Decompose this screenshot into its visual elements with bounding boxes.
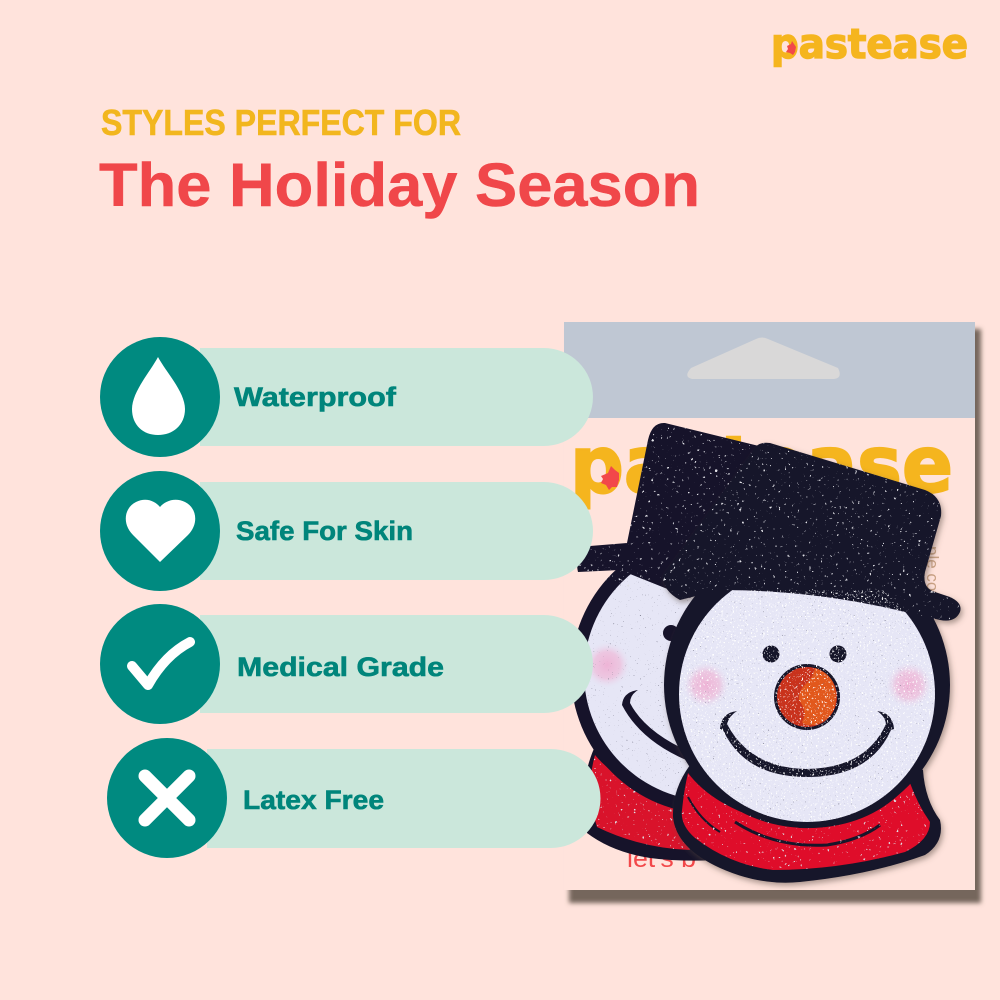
glitter on front scarf [682,776,927,870]
back face outline [571,532,853,814]
pill [200,482,593,580]
icon: heart [126,500,195,562]
pill [200,348,593,446]
right cheek [885,661,933,709]
card footer text: let's b [627,845,696,873]
icon circle [100,337,220,457]
icon: check mark [132,642,190,685]
icon: water drop [132,357,185,435]
feature: medical grade [100,604,593,724]
back scarf outline [583,740,730,861]
label: Waterproof [234,382,397,412]
pill [200,615,593,713]
pill [207,749,600,848]
label: Latex Free [243,785,384,815]
title: The Holiday Season [99,151,700,219]
back scarf glitter [594,758,690,850]
card header band [564,322,975,418]
infographic canvas [99,28,984,906]
hat [663,443,961,621]
back face glitter [587,578,694,794]
left eye [762,646,780,662]
front snowman pastie [663,443,961,883]
back hat [577,423,775,598]
card maple leaf [601,466,619,490]
back eye [663,625,679,641]
glitter on front face [675,590,940,825]
back face [584,545,840,801]
smile [720,711,894,777]
feature: latex free [107,738,600,858]
back scarf [590,755,690,850]
icon circle [100,604,220,724]
label: Medical Grade [237,652,444,682]
subheading: STYLES PERFECT FOR [101,102,461,143]
card shadow [569,329,981,903]
icon circle [107,738,227,858]
card body [564,322,975,890]
icon: cross [145,776,189,820]
face outline [664,542,950,828]
scarf outline [673,700,941,883]
icon circle [100,471,220,591]
scarf creases [688,797,880,845]
back smile [622,690,690,760]
hang hole [687,338,840,379]
logo: pastease [771,20,968,68]
glitter on hats [570,420,965,625]
scarf [682,773,930,870]
left cheek [682,661,730,709]
feature: safe for skin [100,471,593,591]
face [679,566,935,822]
back cheek [583,641,631,689]
right eye [830,646,846,662]
back snowman pastie [574,423,757,861]
card side text: ple cov [923,546,942,600]
product card [564,322,981,903]
feature: waterproof [100,337,593,457]
nose [774,664,840,730]
card brand text: pastease [570,421,953,511]
label: Safe For Skin [236,516,413,546]
